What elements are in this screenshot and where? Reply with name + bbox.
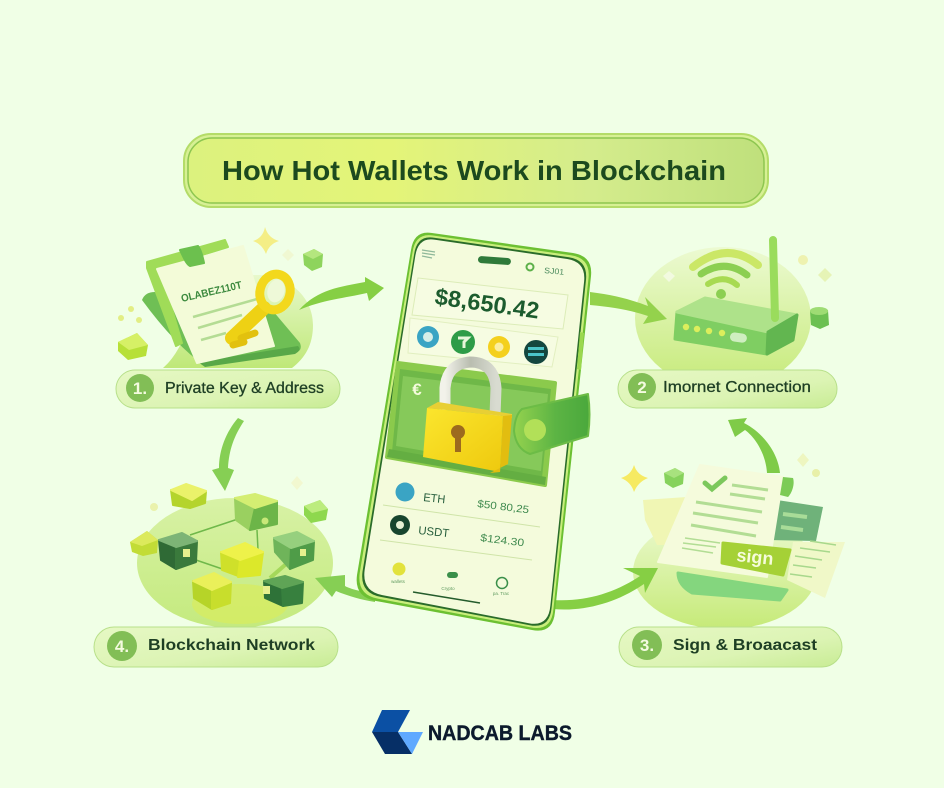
balance card [412,278,568,329]
bottom navigation: pa. Trac [493,591,510,596]
network links [190,515,300,578]
title banner [184,134,768,207]
green cube right [274,532,314,569]
asset list [380,482,540,560]
asset list: $124.30 [480,532,525,549]
small document [787,541,845,598]
icon: padlock [423,362,512,473]
step 1 pill: 1. [133,379,147,398]
phone [357,233,591,631]
step 4 pill [94,627,338,667]
back green document [768,500,823,541]
step 4 pill: Blockchain Network [148,637,315,654]
step 2 pill: 2 [637,378,647,397]
logo text: NADCAB LABS [428,722,572,745]
back clipboard [147,240,228,346]
coin icon row [408,318,558,367]
asset list: $50 80,25 [477,498,530,516]
envelope [643,497,687,545]
title text: How Hot Wallets Work in Blockchain [222,155,726,186]
green wallet [387,363,555,485]
sparkle [253,227,279,254]
document tab [780,477,794,497]
pale cube right [304,500,328,523]
yellow cube bottom [193,573,231,609]
phone screen [364,239,584,624]
asset list: ETH [423,492,446,506]
side cylinder [810,307,829,329]
curved arrow downward [212,418,244,491]
green cube top [235,494,277,530]
green wallet folder [142,292,301,366]
diamond left [663,271,675,282]
icon: golden key [232,271,294,345]
yellow cube top [171,484,206,508]
green wallet: € [412,380,422,399]
dot [150,503,158,511]
step 2 pill: Imornet Connection [663,379,811,396]
diamond [797,453,809,467]
background blob [635,247,811,389]
curved arrow upward [728,418,780,473]
address text: OLABEZ110T [180,279,244,305]
step 3 pill [619,627,842,667]
dot [812,469,820,477]
green tray [678,573,787,600]
step 4 pill: 4. [115,637,129,656]
document sheet [157,246,274,363]
wallet strap [514,394,590,454]
sign button [722,543,790,575]
small green cube [303,249,323,271]
step 2 pill [618,370,837,408]
dot [798,255,808,265]
diamond [291,476,303,490]
arrow from phone [553,568,658,610]
status bar [422,250,565,277]
bottom navigation: Crypto [441,586,455,591]
step 1 pill: Private Key & Address [165,380,324,397]
main document [658,465,783,577]
document lines [193,299,257,340]
sign button: sign [736,545,774,569]
icon: wifi signal [693,253,758,299]
arrow from phone to network [315,575,375,602]
diamond [818,268,832,282]
background blob [163,275,313,368]
phone rim [359,235,589,628]
dark cube bottom [263,576,303,606]
logo mark [372,710,423,754]
document lines [682,485,768,553]
logo: Nadcab Labs [372,710,572,754]
phone body outer [357,233,591,631]
bottom navigation: wallets [391,579,406,584]
check mark [705,478,725,489]
wallet lip [198,346,299,367]
lime cube [118,333,148,360]
icon: router [675,240,797,354]
background blob [137,498,333,628]
step 3 pill: 3. [640,636,654,655]
dots [118,306,142,323]
step 1 pill [116,370,340,408]
step 3 pill: Sign & Broaacast [673,637,818,654]
balance card: $8,650.42 [433,283,541,324]
clip [180,246,204,266]
bottom navigation [391,562,510,603]
phone bezel [362,237,586,626]
panel: step 3 sign and broadcast [553,418,845,667]
yellow sparkle [621,465,648,492]
panel: step 2 internet connection [590,240,837,408]
asset list: USDT [418,525,450,540]
status bar: SJ01 [544,266,565,277]
small green cube [664,468,684,488]
diamond [282,249,294,261]
arrow to router [590,292,667,324]
yellow glow [192,584,288,624]
yellow cube center [221,543,263,577]
yellow cube far left [130,531,158,556]
arrow to phone [299,277,384,310]
dark cube left [159,533,197,569]
panel: step 1 private key and address [116,227,384,408]
panel: step 4 blockchain network [94,418,375,667]
background blob [633,515,817,629]
side button [577,332,584,370]
